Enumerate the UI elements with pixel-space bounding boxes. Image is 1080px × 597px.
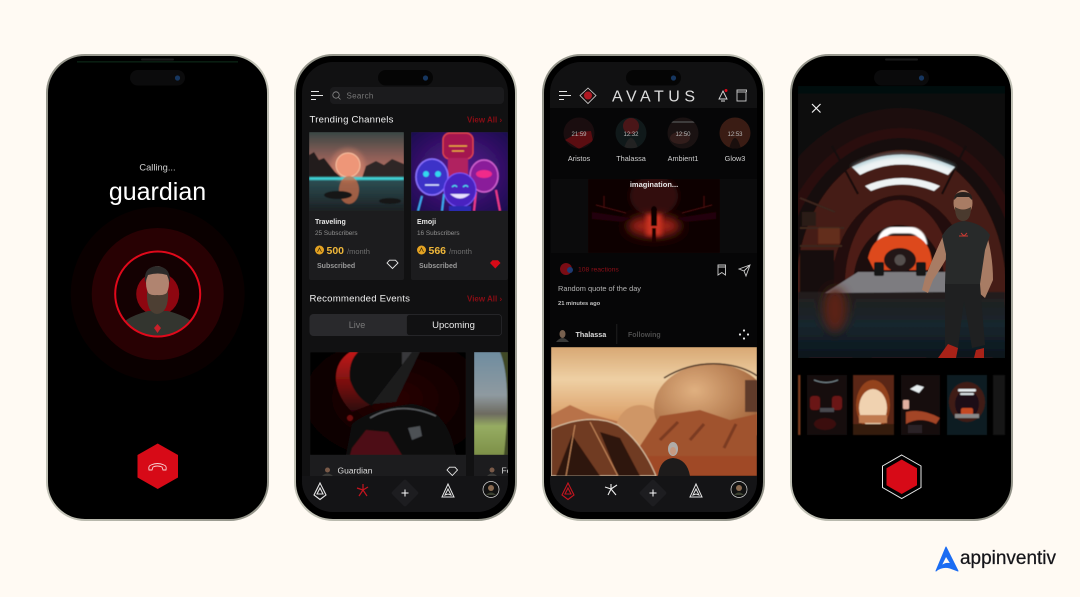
add button — [391, 479, 419, 507]
subscriber count: 25 Subscribers — [315, 230, 358, 237]
header bar — [550, 58, 757, 108]
icon: network active — [357, 484, 368, 496]
logo wordmark: appinventiv — [960, 547, 1056, 569]
subscribed label: Subscribed — [419, 263, 457, 270]
phone frame 1 — [47, 55, 268, 520]
price: 500 — [326, 245, 344, 257]
tabs: live and upcoming — [310, 314, 502, 336]
profile picture — [483, 482, 499, 498]
appinventiv logo — [936, 547, 1056, 571]
link: view all 2: View All › — [467, 294, 502, 304]
card title: Traveling — [315, 219, 346, 226]
thumbnail: partial — [993, 375, 1005, 435]
top sensors 2 — [378, 70, 433, 86]
icon: heart outline — [387, 260, 398, 268]
reactions — [560, 263, 619, 275]
story: glow3: Glow3 — [725, 154, 745, 163]
heading: recommended events: Recommended Events — [310, 294, 410, 304]
subscribed label: Subscribed — [317, 263, 355, 270]
story: aristos: 21:59 — [571, 132, 587, 138]
story: ambient1 — [667, 117, 699, 163]
phone frame 4 — [791, 55, 1012, 520]
bottom navigation 3 — [550, 476, 757, 512]
bottom navigation 2 — [313, 476, 500, 506]
phone 3: feed — [543, 55, 770, 520]
phone frame 3 — [543, 55, 764, 520]
story: thalassa — [615, 117, 647, 163]
menu icon — [311, 91, 323, 100]
caller name: guardian — [109, 178, 206, 206]
heading: trending channels: Trending Channels — [310, 114, 394, 126]
logo mark — [936, 547, 958, 571]
tabs: live and upcoming: Upcoming — [432, 320, 475, 331]
story: glow3 — [719, 117, 751, 163]
calling label: Calling... — [139, 162, 176, 172]
post timestamp: 21 minutes ago — [558, 301, 601, 307]
story: aristos — [563, 117, 595, 163]
top sensors 4 — [874, 58, 929, 86]
link: view all 1: View All › — [467, 116, 502, 124]
avatar: thalassa — [658, 442, 690, 476]
icon: bookmark — [718, 265, 726, 275]
search bar — [330, 87, 504, 104]
capture button — [882, 455, 921, 498]
story: thalassa: Thalassa — [616, 154, 647, 163]
phone 2: channels and events — [295, 55, 516, 520]
card: emoji — [411, 132, 508, 280]
author name: Thalassa — [576, 330, 607, 339]
thumbnail: cockpit — [807, 375, 847, 435]
story: ambient1: 12:50 — [675, 132, 691, 138]
image: neon robots — [411, 132, 508, 212]
price: /month — [347, 247, 370, 256]
price: 566 — [428, 245, 446, 257]
host avatar — [487, 468, 497, 476]
ceiling lights — [852, 154, 955, 175]
icon: heart filled — [490, 260, 500, 268]
event card: second — [474, 352, 512, 476]
story: ambient1: Ambient1 — [668, 154, 698, 163]
icon: bell — [719, 89, 728, 101]
search bar: Search — [346, 92, 374, 100]
icon: avatar triangle — [690, 484, 702, 497]
icon: send — [739, 265, 750, 276]
floor — [798, 292, 1005, 358]
subscriber count: 16 Subscribers — [417, 230, 460, 237]
pulsing avatar — [71, 207, 245, 381]
thumbnail strip edge — [798, 375, 800, 435]
card: traveling — [309, 132, 404, 280]
story: glow3: 12:53 — [727, 132, 743, 138]
card title: Emoji — [417, 219, 436, 226]
glowing arc — [880, 230, 924, 245]
icon: heart outline — [447, 467, 458, 476]
phone 1: calling screen — [47, 55, 268, 520]
image: neon sunset lake — [309, 132, 404, 211]
image: landscape — [474, 352, 508, 455]
shelves — [800, 198, 844, 246]
post caption: Random quote of the day — [558, 284, 641, 293]
thumbnail: garage red — [901, 375, 940, 435]
end call button — [138, 444, 178, 489]
price — [315, 246, 370, 254]
sports car — [868, 236, 932, 270]
phone frame 2 — [295, 55, 516, 520]
screen 2 — [302, 58, 512, 512]
logo badge — [580, 88, 596, 104]
story: aristos: Aristos — [568, 154, 590, 163]
avatar portrait — [126, 266, 190, 336]
host name: Fc — [502, 466, 512, 476]
hangar scene — [751, 86, 1051, 472]
stories row — [563, 117, 751, 163]
profile picture — [731, 482, 747, 498]
thumbnail: mars window — [853, 375, 894, 435]
icon: copy — [737, 90, 746, 101]
post image: imagination: imagination... — [630, 180, 678, 189]
price: /month — [449, 247, 472, 256]
post author row — [556, 324, 749, 344]
icon: more dots — [739, 329, 749, 340]
reactions: 108 reactions — [578, 266, 619, 274]
post image: mars base — [551, 347, 770, 476]
price — [417, 246, 472, 254]
icon: network — [605, 484, 617, 495]
screen 3 — [550, 58, 770, 512]
icon: avatar triangle — [442, 484, 454, 497]
follow status: Following — [628, 332, 661, 339]
brand wordmark: AVATUS — [612, 88, 695, 106]
tabs: live and upcoming: Live — [349, 320, 365, 330]
add button — [639, 479, 667, 507]
thumbnail: hangar — [947, 375, 987, 435]
image: astronaut — [310, 352, 466, 455]
thumbnails — [798, 375, 1005, 435]
avatar: man standing — [922, 190, 993, 358]
phone 4: avatar environment picker — [751, 55, 1051, 520]
menu icon — [559, 91, 571, 100]
icon: home — [314, 483, 326, 500]
top sensors 1 — [77, 58, 238, 86]
story: thalassa: 12:32 — [623, 132, 639, 138]
host avatar — [322, 468, 333, 476]
icon: home active — [562, 483, 574, 500]
host name: Guardian — [338, 466, 373, 476]
close icon — [812, 104, 820, 112]
event card: guardian — [310, 352, 466, 476]
author avatar — [556, 330, 569, 342]
post image: imagination — [551, 176, 757, 253]
